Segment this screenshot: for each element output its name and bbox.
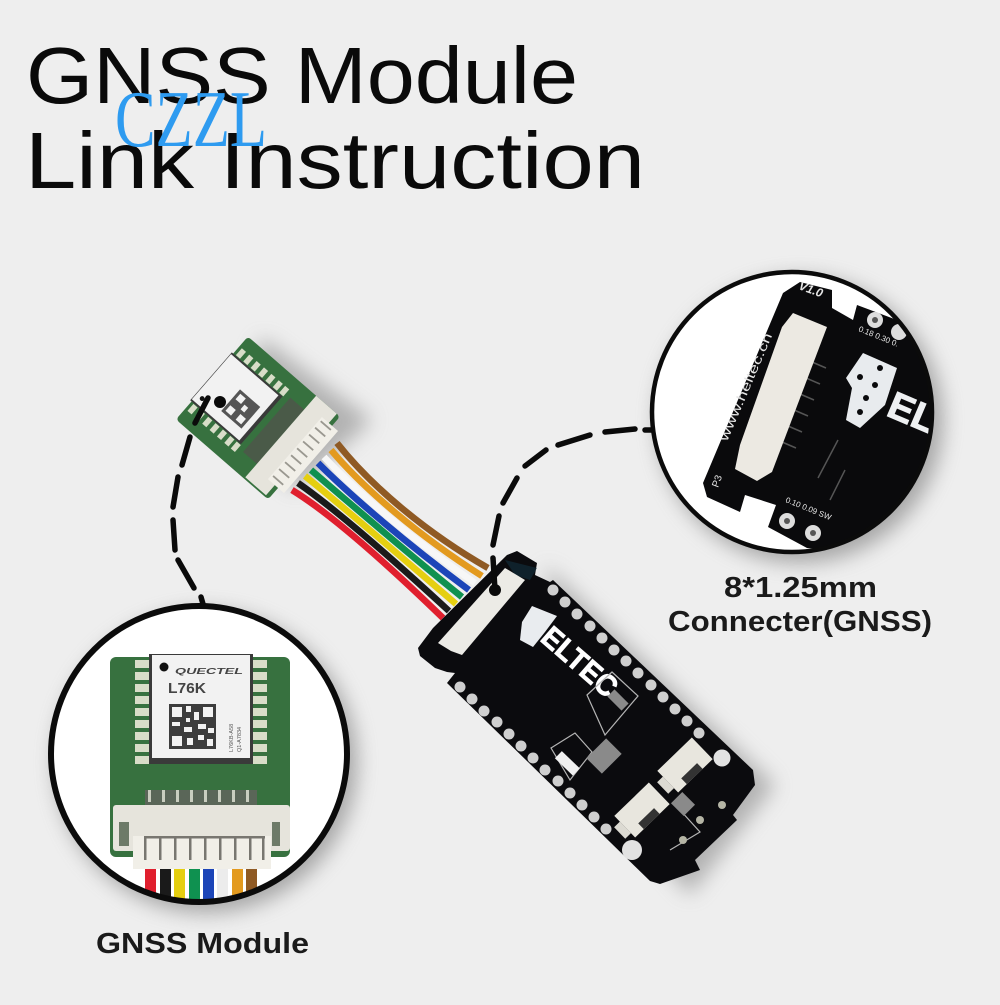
title: GNSS Module (26, 31, 578, 120)
GNSS connector on board (438, 568, 525, 655)
right callout circle: connector close-up (652, 272, 950, 563)
caption: GNSS module: GNSS Module (96, 928, 309, 960)
chip QR code (169, 704, 216, 749)
board silkscreen: 0.18 0.30 0. (857, 325, 900, 349)
JST solar connector (652, 738, 713, 798)
title: Link Instruction (25, 116, 645, 205)
solder pads (135, 660, 267, 764)
caption: connector: Connecter(GNSS) (668, 606, 932, 638)
board silkscreen: www.heltec.cn (716, 331, 775, 445)
PCB (110, 657, 290, 857)
left callout circle: GNSS module close-up: Q1-A7834 (237, 727, 243, 752)
close-up connector (735, 313, 827, 481)
circuit details (551, 672, 700, 850)
pads (779, 312, 907, 541)
close-up board (703, 282, 930, 548)
board silkscreen (710, 279, 900, 522)
brand text: ELTEC (534, 620, 624, 704)
connector housing (113, 805, 290, 851)
dashed leader: module to left circle (173, 396, 226, 604)
JST battery connector (609, 783, 670, 843)
connector plug (133, 836, 271, 869)
logo mark (520, 606, 557, 647)
watermark: CZZL: CZZL (115, 76, 267, 164)
logo text: EL (881, 385, 943, 442)
chip serial text: L76KB-A58 (229, 724, 235, 752)
left callout circle: GNSS module close-up (51, 606, 357, 913)
caption: connector (668, 572, 932, 638)
logo blocks (846, 353, 897, 428)
board silkscreen: V1.0 (797, 279, 825, 300)
wires in close-up (145, 869, 257, 899)
board silkscreen: P3 (710, 473, 725, 489)
chip brand: QUECTEL (175, 666, 243, 676)
caption: connector: 8*1.25mm (724, 572, 877, 604)
GNSS module photo (small, rotated) (175, 335, 346, 505)
HELTEC board (418, 551, 755, 884)
title (25, 31, 645, 205)
dashed leader: board connector to right circle (489, 429, 651, 596)
board outline (418, 551, 755, 884)
header pads (454, 584, 704, 834)
soft shadows (230, 338, 775, 895)
wire harness (292, 443, 488, 618)
board silkscreen: 0.10 0.09 SW (784, 496, 833, 522)
chip model: L76K (168, 680, 206, 697)
mounting holes (622, 840, 642, 860)
close-up pins (782, 362, 845, 500)
pin row (145, 790, 257, 805)
GNSS chip (152, 655, 250, 758)
